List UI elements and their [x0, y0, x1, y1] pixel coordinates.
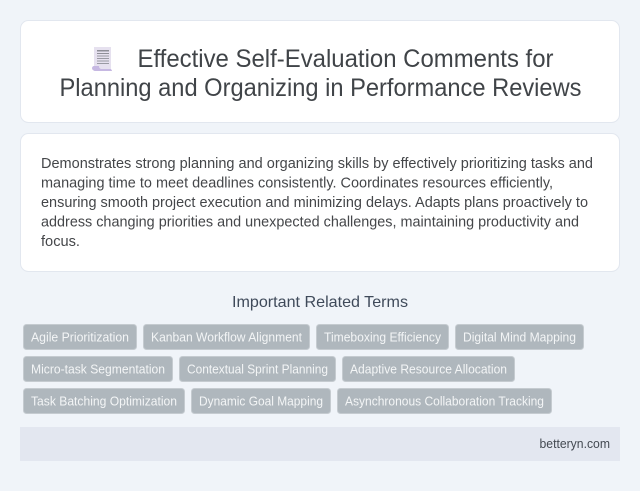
- text block: description: ensuring smooth project execution and minimizing delays. Adapts plans proactively to: [41, 194, 588, 211]
- tag: [24, 356, 172, 382]
- tag: [192, 388, 330, 414]
- tag: Micro-task Segmentation: [31, 362, 165, 376]
- tag: [24, 388, 184, 414]
- tag: [456, 324, 584, 350]
- tag: [24, 324, 136, 350]
- tag: Digital Mind Mapping: [463, 330, 576, 344]
- tag: Agile Prioritization: [31, 330, 129, 344]
- text block: description: focus.: [41, 233, 80, 250]
- footer source text: betteryn.com: [540, 437, 610, 451]
- icon: document scroll: [92, 47, 112, 71]
- heading: important related terms: Important Related Terms: [232, 294, 408, 311]
- heading: Effective Self-Evaluation Comments for: [138, 45, 554, 73]
- text block: description: Demonstrates strong planning and organizing skills by effectively prioritizing tasks and: [41, 155, 593, 172]
- tag: Task Batching Optimization: [31, 394, 177, 408]
- tag list: [24, 324, 584, 414]
- tag: [316, 324, 448, 350]
- heading: Planning and Organizing in Performance Reviews: [60, 74, 582, 102]
- tag: Kanban Workflow Alignment: [151, 330, 302, 344]
- footer: [20, 427, 620, 461]
- heading: [60, 45, 582, 102]
- tag: [342, 356, 514, 382]
- panel: description: [20, 134, 620, 272]
- tag: [338, 388, 552, 414]
- text block: description: managing time to meet deadlines consistently. Coordinates resources efficiently,: [41, 174, 553, 192]
- text block: description: address changing priorities and unexpected challenges, maintaining productivity and: [41, 214, 579, 230]
- tag: [144, 324, 310, 350]
- text block: description: [41, 155, 593, 250]
- tag: Adaptive Resource Allocation: [350, 362, 507, 376]
- tag: Dynamic Goal Mapping: [199, 394, 323, 408]
- tag: Timeboxing Efficiency: [324, 330, 442, 344]
- tag: [180, 356, 336, 382]
- tag: Asynchronous Collaboration Tracking: [345, 394, 544, 408]
- panel: title card: [20, 20, 620, 122]
- tag: Contextual Sprint Planning: [187, 362, 328, 376]
